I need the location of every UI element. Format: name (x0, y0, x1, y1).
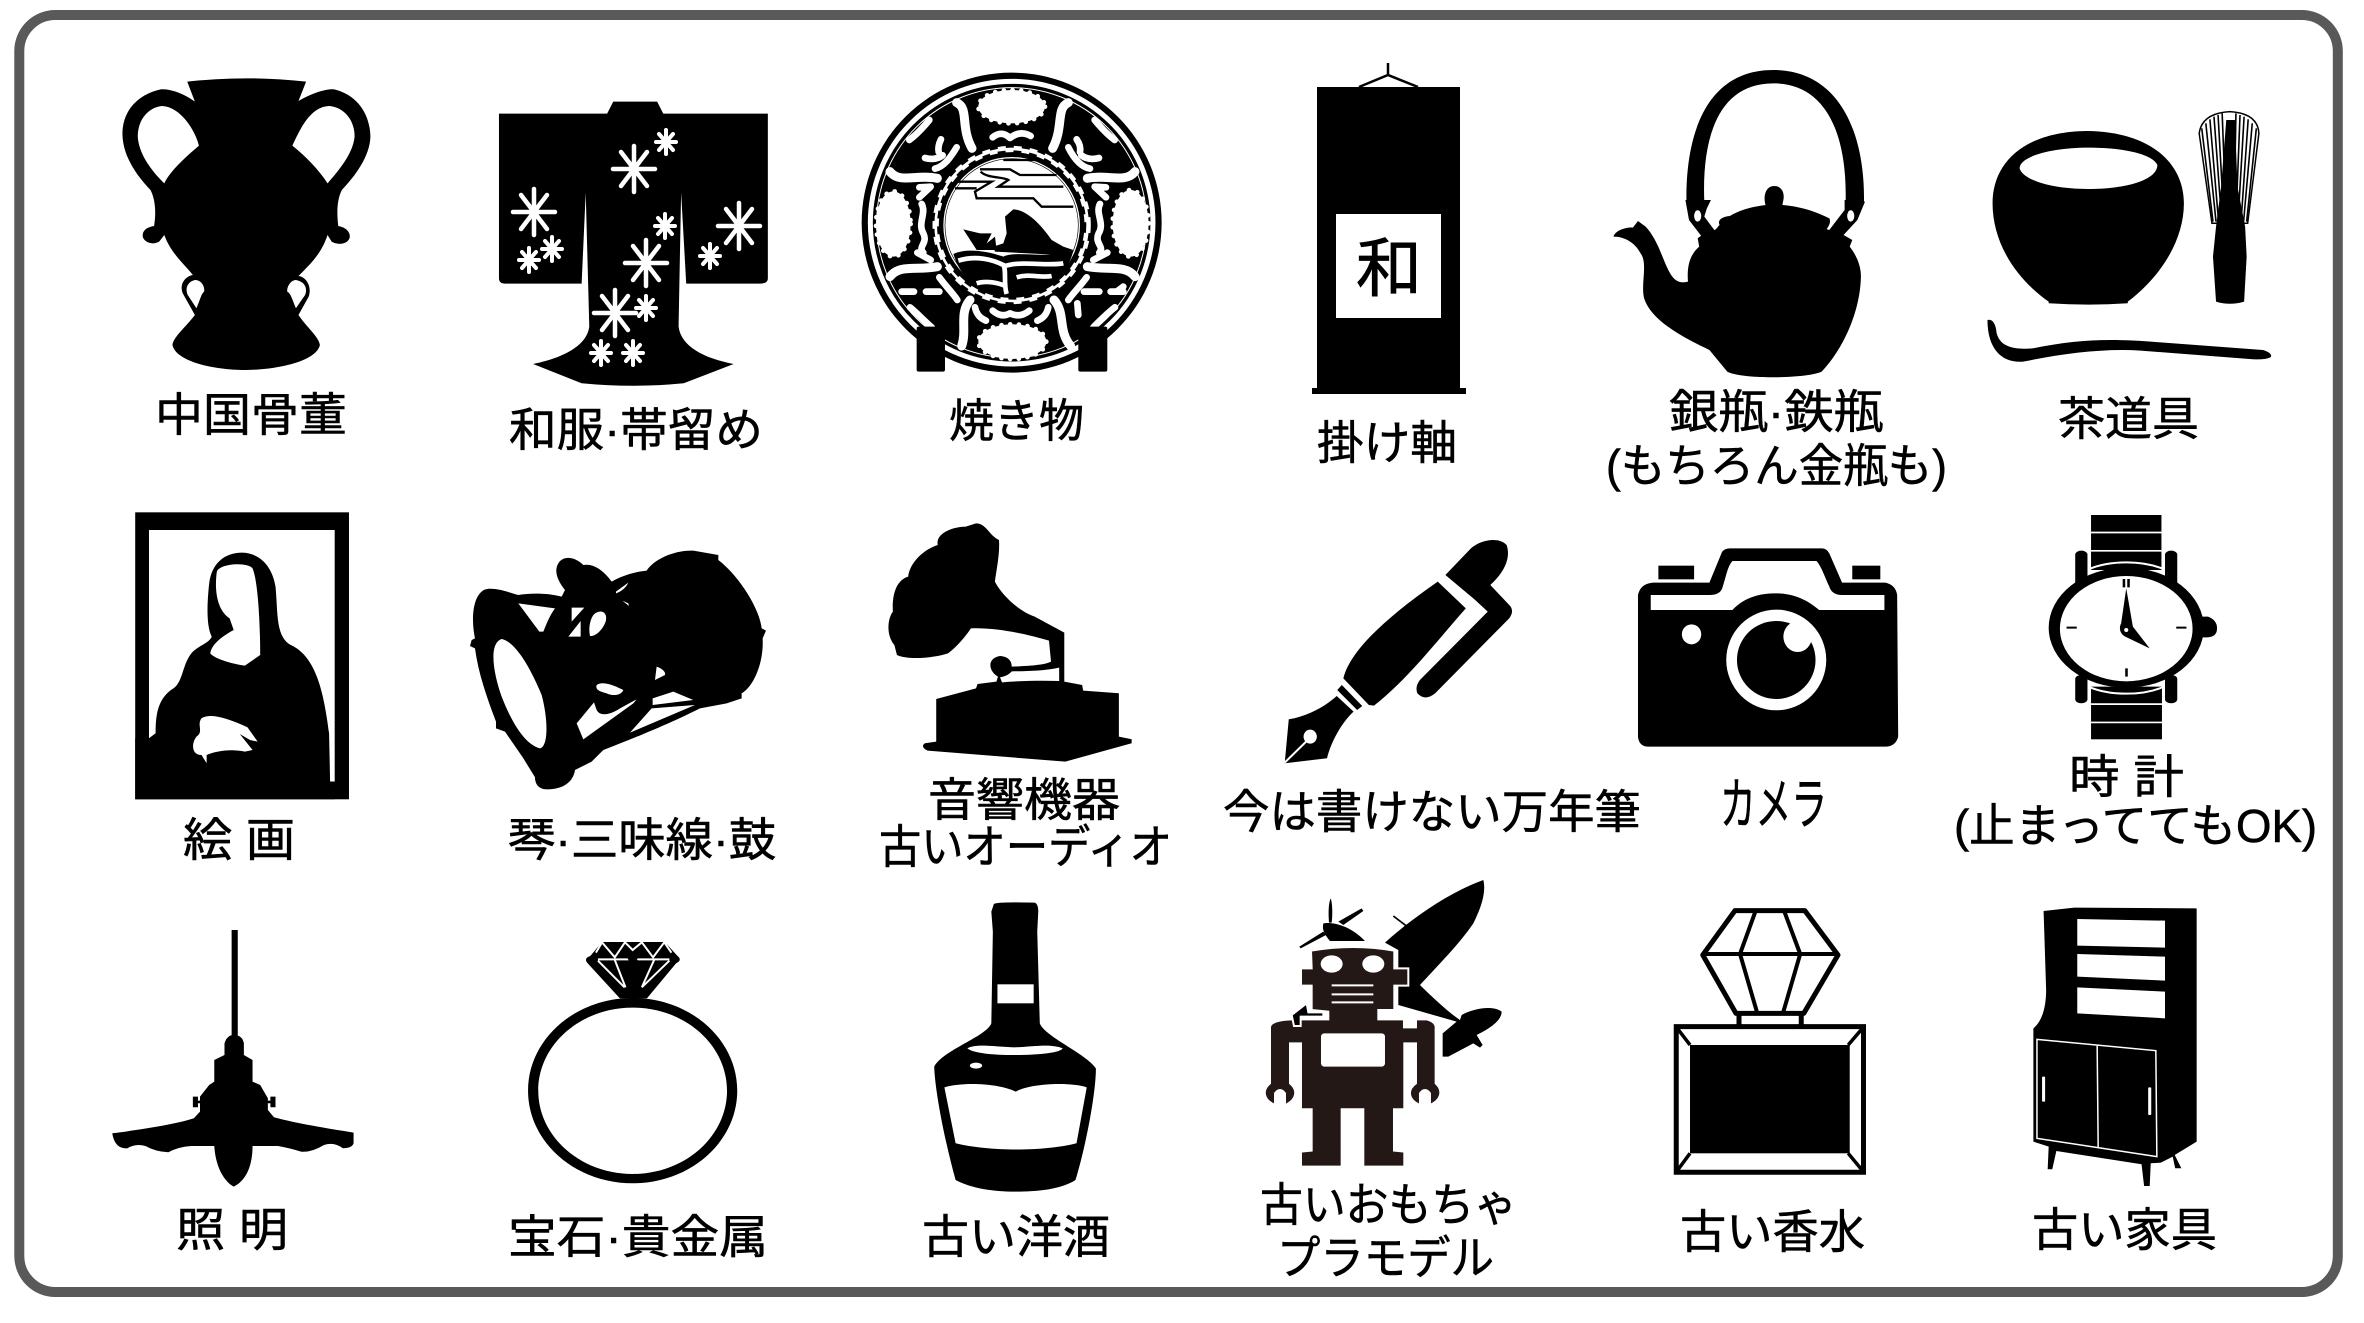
icon: cabinet (2033, 908, 2197, 1186)
icon: decorated plate on stand (862, 73, 1162, 373)
label: 焼き物: 焼き物 (949, 395, 1084, 447)
item: chinese antique vase (122, 78, 370, 441)
label: プラモデル: プラモデル (1277, 1232, 1494, 1284)
icon: bottle (934, 902, 1096, 1192)
label: 照明: 照 明 (176, 1204, 288, 1256)
item: old perfume (1676, 911, 1865, 1258)
label: 銀瓶・鉄瓶: 銀瓶·鉄瓶 (1669, 386, 1883, 438)
label: カメラ: カメラ (1720, 773, 1827, 836)
icon: perfume bottle (1676, 911, 1863, 1172)
icon: pendant lamp (112, 930, 354, 1187)
icon: hanging scroll: 和 (1356, 233, 1422, 305)
icon: diamond ring (528, 942, 737, 1183)
label: 今は書けない万年筆: 今は書けない万年筆 (1223, 786, 1641, 838)
icon: framed portrait (135, 512, 349, 799)
item: iron kettle (1606, 70, 1947, 492)
item: kimono (499, 102, 768, 456)
item: hanging scroll (1312, 63, 1466, 469)
icon: tsuzumi drum (470, 551, 766, 789)
icon: robot and airplane (1265, 880, 1502, 1167)
icon: hanging scroll (1312, 63, 1466, 394)
label: 時計: 時 計 (2069, 751, 2184, 803)
icon: kettle (1613, 70, 1865, 377)
item: old furniture (2032, 908, 2217, 1256)
label: 掛け軸: 掛け軸 (1317, 417, 1457, 469)
icon: gramophone (888, 523, 1132, 762)
label: 古い洋酒: 古い洋酒 (922, 1211, 1110, 1263)
icon: vase (122, 78, 370, 370)
label: 琴・三味線・鼓: 琴·三味線·鼓 (508, 814, 776, 866)
item: watch (1954, 515, 2317, 852)
label: 宝石・貴金属: 宝石·貴金属 (508, 1211, 768, 1263)
icon: wristwatch (2049, 515, 2217, 739)
icon: camera (1638, 548, 1898, 747)
item: fountain pen (1223, 540, 1641, 838)
icon: kimono (499, 102, 768, 386)
label: 和服・帯留め: 和服·帯留め (509, 404, 763, 456)
item: old toys and plastic models (1260, 880, 1517, 1284)
label: 古いおもちゃ: 古いおもちゃ (1260, 1179, 1517, 1231)
item: jewelry (508, 942, 768, 1263)
icon: fountain pen (1285, 540, 1512, 763)
item: audio equipment (879, 523, 1172, 873)
item: tea ceremony tools (1987, 112, 2271, 445)
label: 古い家具: 古い家具 (2032, 1204, 2217, 1256)
item: camera (1638, 548, 1898, 836)
label: 中国骨董: 中国骨董 (155, 389, 347, 441)
label: 古いオーディオ: 古いオーディオ (879, 821, 1172, 873)
item: ceramic plate (862, 73, 1162, 447)
label: もちろん金瓶も: (もちろん金瓶も) (1606, 440, 1947, 492)
item: old liquor (922, 902, 1110, 1263)
label: 古い香水: 古い香水 (1680, 1206, 1865, 1258)
item: lighting (112, 930, 354, 1256)
item: painting (135, 512, 349, 866)
label: 茶道具: 茶道具 (2058, 393, 2199, 445)
label: 止まっててもOK: (止まっててもOK) (1954, 800, 2317, 852)
item: japanese instruments (470, 551, 776, 866)
label: 音響機器: 音響機器 (928, 774, 1120, 826)
label: 絵画: 絵 画 (183, 814, 295, 866)
icon: tea bowl, whisk and scoop (1987, 112, 2271, 362)
